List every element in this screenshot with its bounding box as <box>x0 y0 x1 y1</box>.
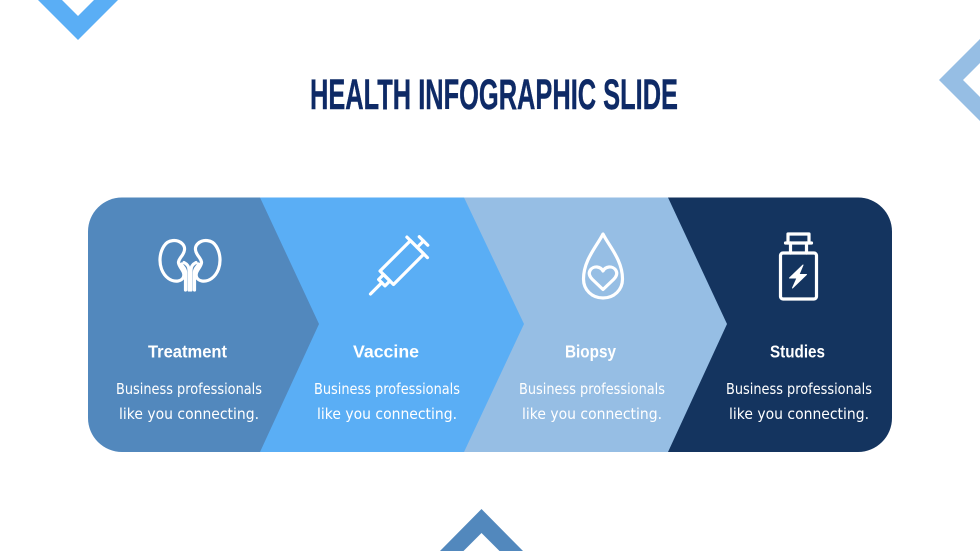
panel: studies background <box>640 198 892 452</box>
text: biopsy description: Business professionals <box>519 380 665 398</box>
text: vaccine description: like you connecting. <box>317 405 457 423</box>
panel: vaccine chevron <box>240 198 524 452</box>
title: HEALTH INFOGRAPHIC SLIDE <box>310 72 678 119</box>
text: studies description <box>726 380 872 423</box>
text: studies description: like you connecting. <box>729 405 869 423</box>
decorative chevron: top left <box>38 0 118 40</box>
icon: syringe <box>360 231 434 304</box>
label: vaccine: Vaccine <box>353 342 419 362</box>
decorative chevron: bottom <box>440 509 523 551</box>
text: treatment description: like you connecting. <box>119 405 259 423</box>
text: studies description: Business professionals <box>726 380 872 398</box>
text: biopsy description: like you connecting. <box>522 405 662 423</box>
text: treatment description <box>116 380 262 423</box>
process panel <box>88 198 892 452</box>
text: treatment description: Business professionals <box>116 380 262 398</box>
panel: biopsy chevron <box>440 198 727 452</box>
icon: bottle with lightning bolt <box>780 234 816 299</box>
text: biopsy description <box>519 380 665 423</box>
icon: droplet with heart <box>584 234 622 298</box>
panel: treatment chevron <box>88 198 319 452</box>
label: treatment: Treatment <box>148 342 227 362</box>
label: biopsy: Biopsy <box>565 342 616 362</box>
icon: kidneys <box>160 241 220 290</box>
label: studies: Studies <box>770 342 825 362</box>
decorative chevron: right <box>939 39 980 121</box>
text: vaccine description: Business professionals <box>314 380 460 398</box>
text: vaccine description <box>314 380 460 423</box>
